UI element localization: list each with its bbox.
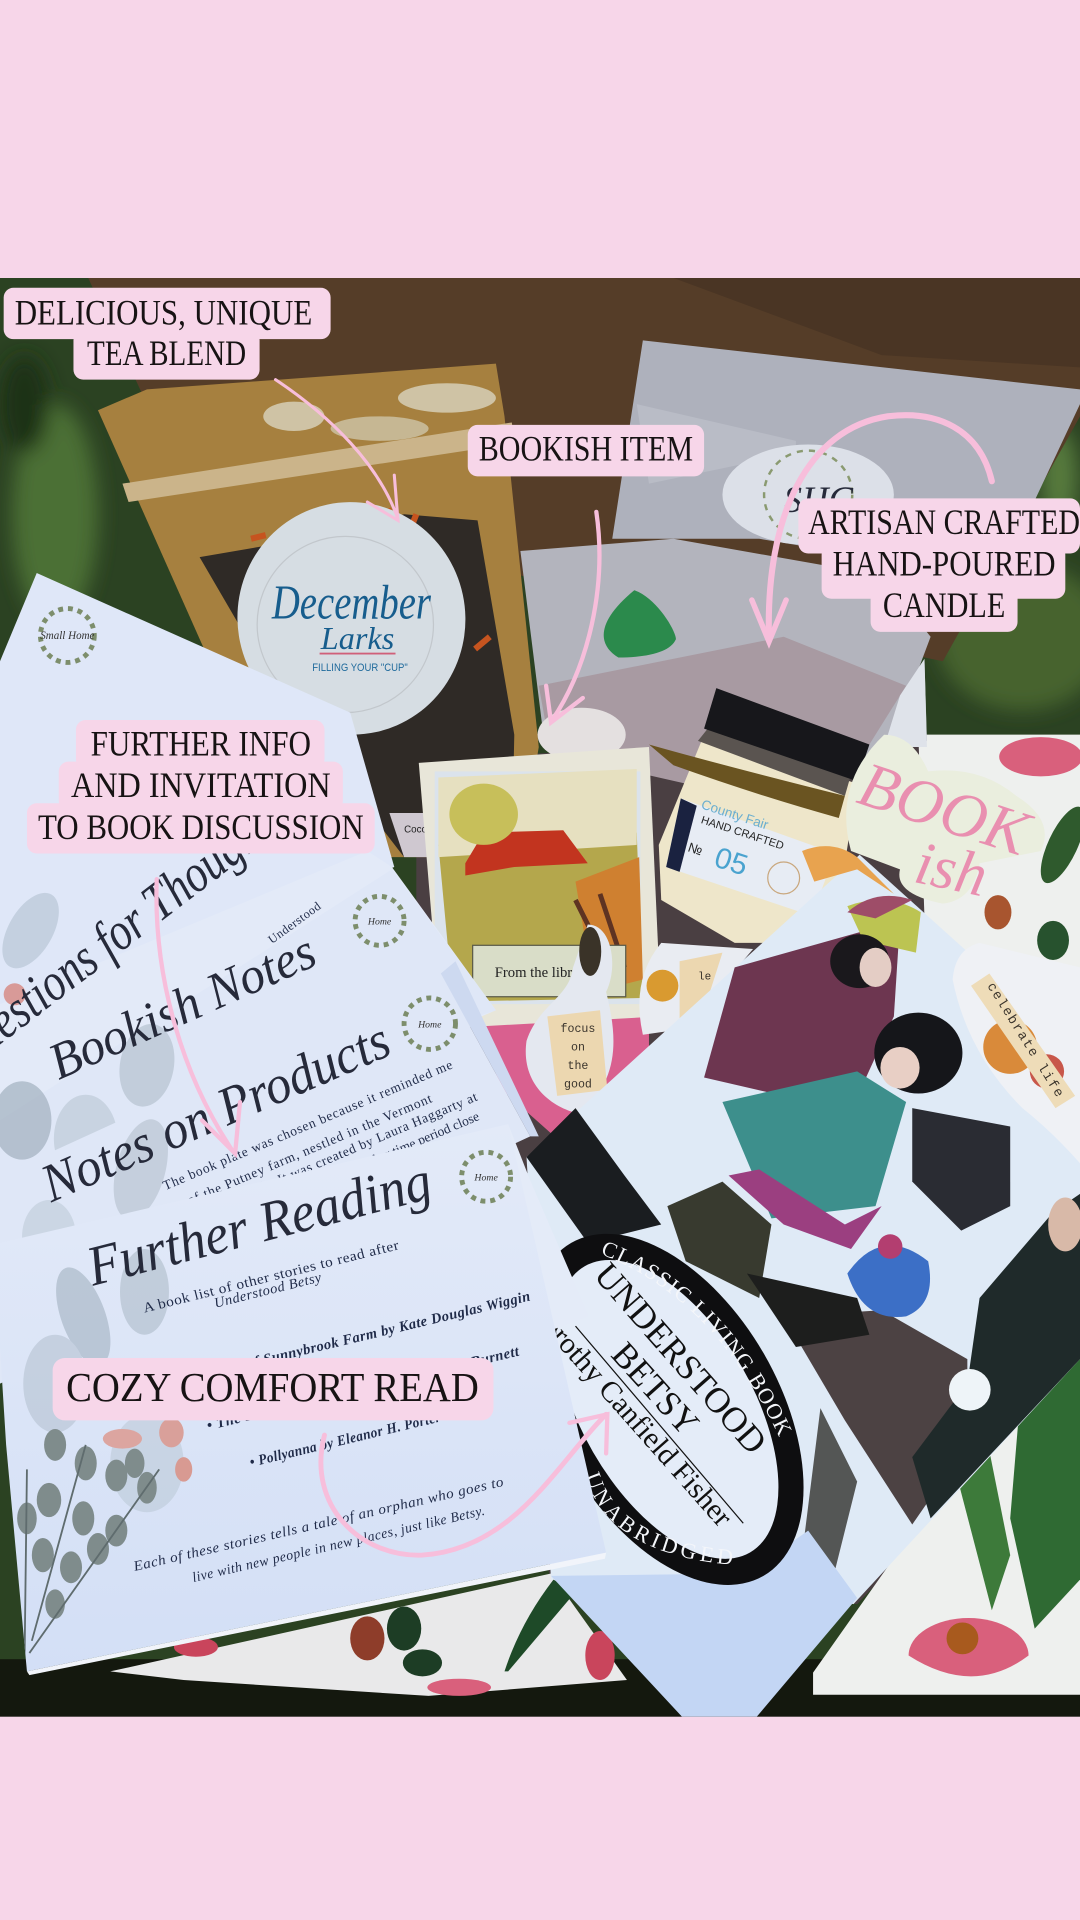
white box interior: [520, 539, 931, 784]
candle jar: №: [686, 840, 704, 858]
wreath logo: Home: [473, 1172, 498, 1183]
label: tea blend: DELICIOUS, UNIQUE: [15, 292, 312, 332]
sticker: focus on the good: on: [571, 1042, 585, 1055]
gift bag with sticker: SHC: [784, 479, 854, 520]
book title oval: UNDERSTOOD: [587, 1255, 775, 1462]
sticker: celebrate life: [953, 943, 1080, 1163]
book plate: [419, 747, 661, 1029]
book cover illustration: [526, 854, 1080, 1717]
arrow: tea: [276, 380, 398, 520]
sheet behind Further Reading: [512, 1143, 572, 1329]
card: Further Reading: Each of these stories tells a tale of an orphan who goes to: [131, 1474, 505, 1575]
green wax seal: [604, 590, 676, 658]
tea pouch: [98, 364, 539, 857]
tissue underlay: [416, 747, 924, 1604]
label: further info: AND INVITATION: [71, 765, 331, 805]
tea sticker: December Larks: FILLING YOUR "CUP": [312, 662, 408, 674]
card: Further Reading: Understood Betsy: [213, 1269, 324, 1312]
label: bookish item: BOOKISH ITEM: [479, 428, 693, 468]
sticker: focus on the good: good: [564, 1078, 592, 1091]
tea pouch: Coconut, Casserat, Cream: [404, 825, 520, 836]
book lower cover: [551, 1531, 857, 1717]
plate caption: From the library of: [495, 965, 607, 981]
card: Further Reading: Further Reading: [80, 1150, 438, 1299]
book title oval: Dorothy Canfield Fisher: [521, 1294, 739, 1533]
grass: [0, 355, 1080, 710]
info card 1 (top): [0, 573, 394, 1016]
book title oval: CLASSIC LIVING BOOK: [602, 1242, 792, 1437]
book title oval: [555, 1234, 804, 1585]
card: Further Reading: • Rebecca of Sunnybrook Farm by Kate Douglas Wiggin: [181, 1289, 532, 1388]
wreath logo: [404, 998, 456, 1049]
pink paper shred: [486, 1018, 649, 1133]
book title oval: UNABRIDGED: [588, 1471, 732, 1564]
sticker: flower note: le: [698, 972, 711, 984]
card: Further Reading: live with new people in new places, just like Betsy.: [191, 1503, 487, 1586]
label: cozy comfort read: COZY COMFORT READ: [66, 1365, 479, 1411]
label: tea blend: [4, 288, 331, 380]
card: Questions for Thought: [0, 854, 495, 1120]
sticker: focus on the good: the: [567, 1060, 588, 1073]
wreath logo: Home: [417, 1019, 442, 1030]
label: cozy comfort read: [53, 1358, 493, 1420]
book title oval: BETSY: [604, 1334, 707, 1443]
sticker: flower note: [639, 943, 753, 1035]
arrow: further info: [156, 879, 240, 1153]
wreath logo: Small Home: [40, 630, 95, 642]
cardboard box lid: [88, 278, 1080, 661]
arrow: candle: [752, 415, 992, 642]
product notes body: of the Putney farm, nestled in the Vermont: [185, 1091, 434, 1208]
tea sticker: December Larks: [237, 502, 466, 734]
card: Bookish Notes: Bookish Notes: [40, 923, 324, 1091]
wreath logo: Home: [367, 916, 392, 927]
tea sticker: December Larks: Larks: [320, 621, 394, 656]
photo of the book box: [0, 278, 1080, 1717]
label: candle: CANDLE: [883, 585, 1005, 625]
product notes body: countryside. It was created by Laura Haggarty at: [203, 1089, 480, 1217]
label: candle: [798, 498, 1080, 632]
label: further info: TO BOOK DISCUSSION: [38, 807, 364, 847]
candle jar: HAND CRAFTED: [699, 814, 785, 852]
wreath logo: [462, 1152, 511, 1201]
gift bag with sticker: [612, 340, 1080, 546]
candle jar: 05: [710, 841, 752, 882]
eucalyptus bunch: [17, 1429, 157, 1619]
product notes body: who uses vintage artwork in her time period close: [228, 1108, 482, 1227]
sticker: celebrate life: celebrate life: [983, 980, 1065, 1101]
arrow: bookish item: [546, 512, 599, 722]
card: Bookish Notes: [0, 894, 489, 1160]
floral fabric: [110, 735, 1080, 1696]
sticker: focus on the good: [526, 924, 613, 1114]
tea sticker: December Larks: December: [271, 574, 432, 629]
arrow: cozy read: [321, 1414, 607, 1555]
card: Notes on Products: [0, 961, 539, 1384]
label: further info: FURTHER INFO: [91, 724, 311, 764]
card: Further Reading: A book list of other stories to read after: [142, 1237, 401, 1317]
card: Further Reading: • Pollyanna by Eleanor H. Porter: [248, 1410, 442, 1471]
sticker: Book-ish: [802, 735, 1045, 910]
sticker: Book-ish: BOOK: [850, 748, 1041, 870]
card: Notes on Products: Notes on Products: [31, 1010, 399, 1214]
label: bookish item: [468, 425, 704, 476]
card: Further Reading: • The Secret Garden by Frances Hodgson Burnett: [205, 1344, 521, 1434]
label: further info: [27, 720, 375, 853]
sticker: focus on the good: focus: [561, 1023, 595, 1036]
wreath logo: [40, 609, 95, 662]
card: Questions for Thought: Understood: [265, 899, 324, 947]
card: Questions for Thought: why?: [309, 915, 341, 943]
wreath logo: [355, 896, 404, 945]
label: tea blend: TEA BLEND: [87, 333, 246, 373]
candle jar: County Fair: [699, 797, 771, 833]
card: Further Reading: [0, 1124, 606, 1675]
product notes body: The book plate was chosen because it reminded me: [161, 1057, 455, 1193]
candle jar: [649, 688, 869, 943]
sticker: Book-ish: ish: [909, 829, 993, 910]
